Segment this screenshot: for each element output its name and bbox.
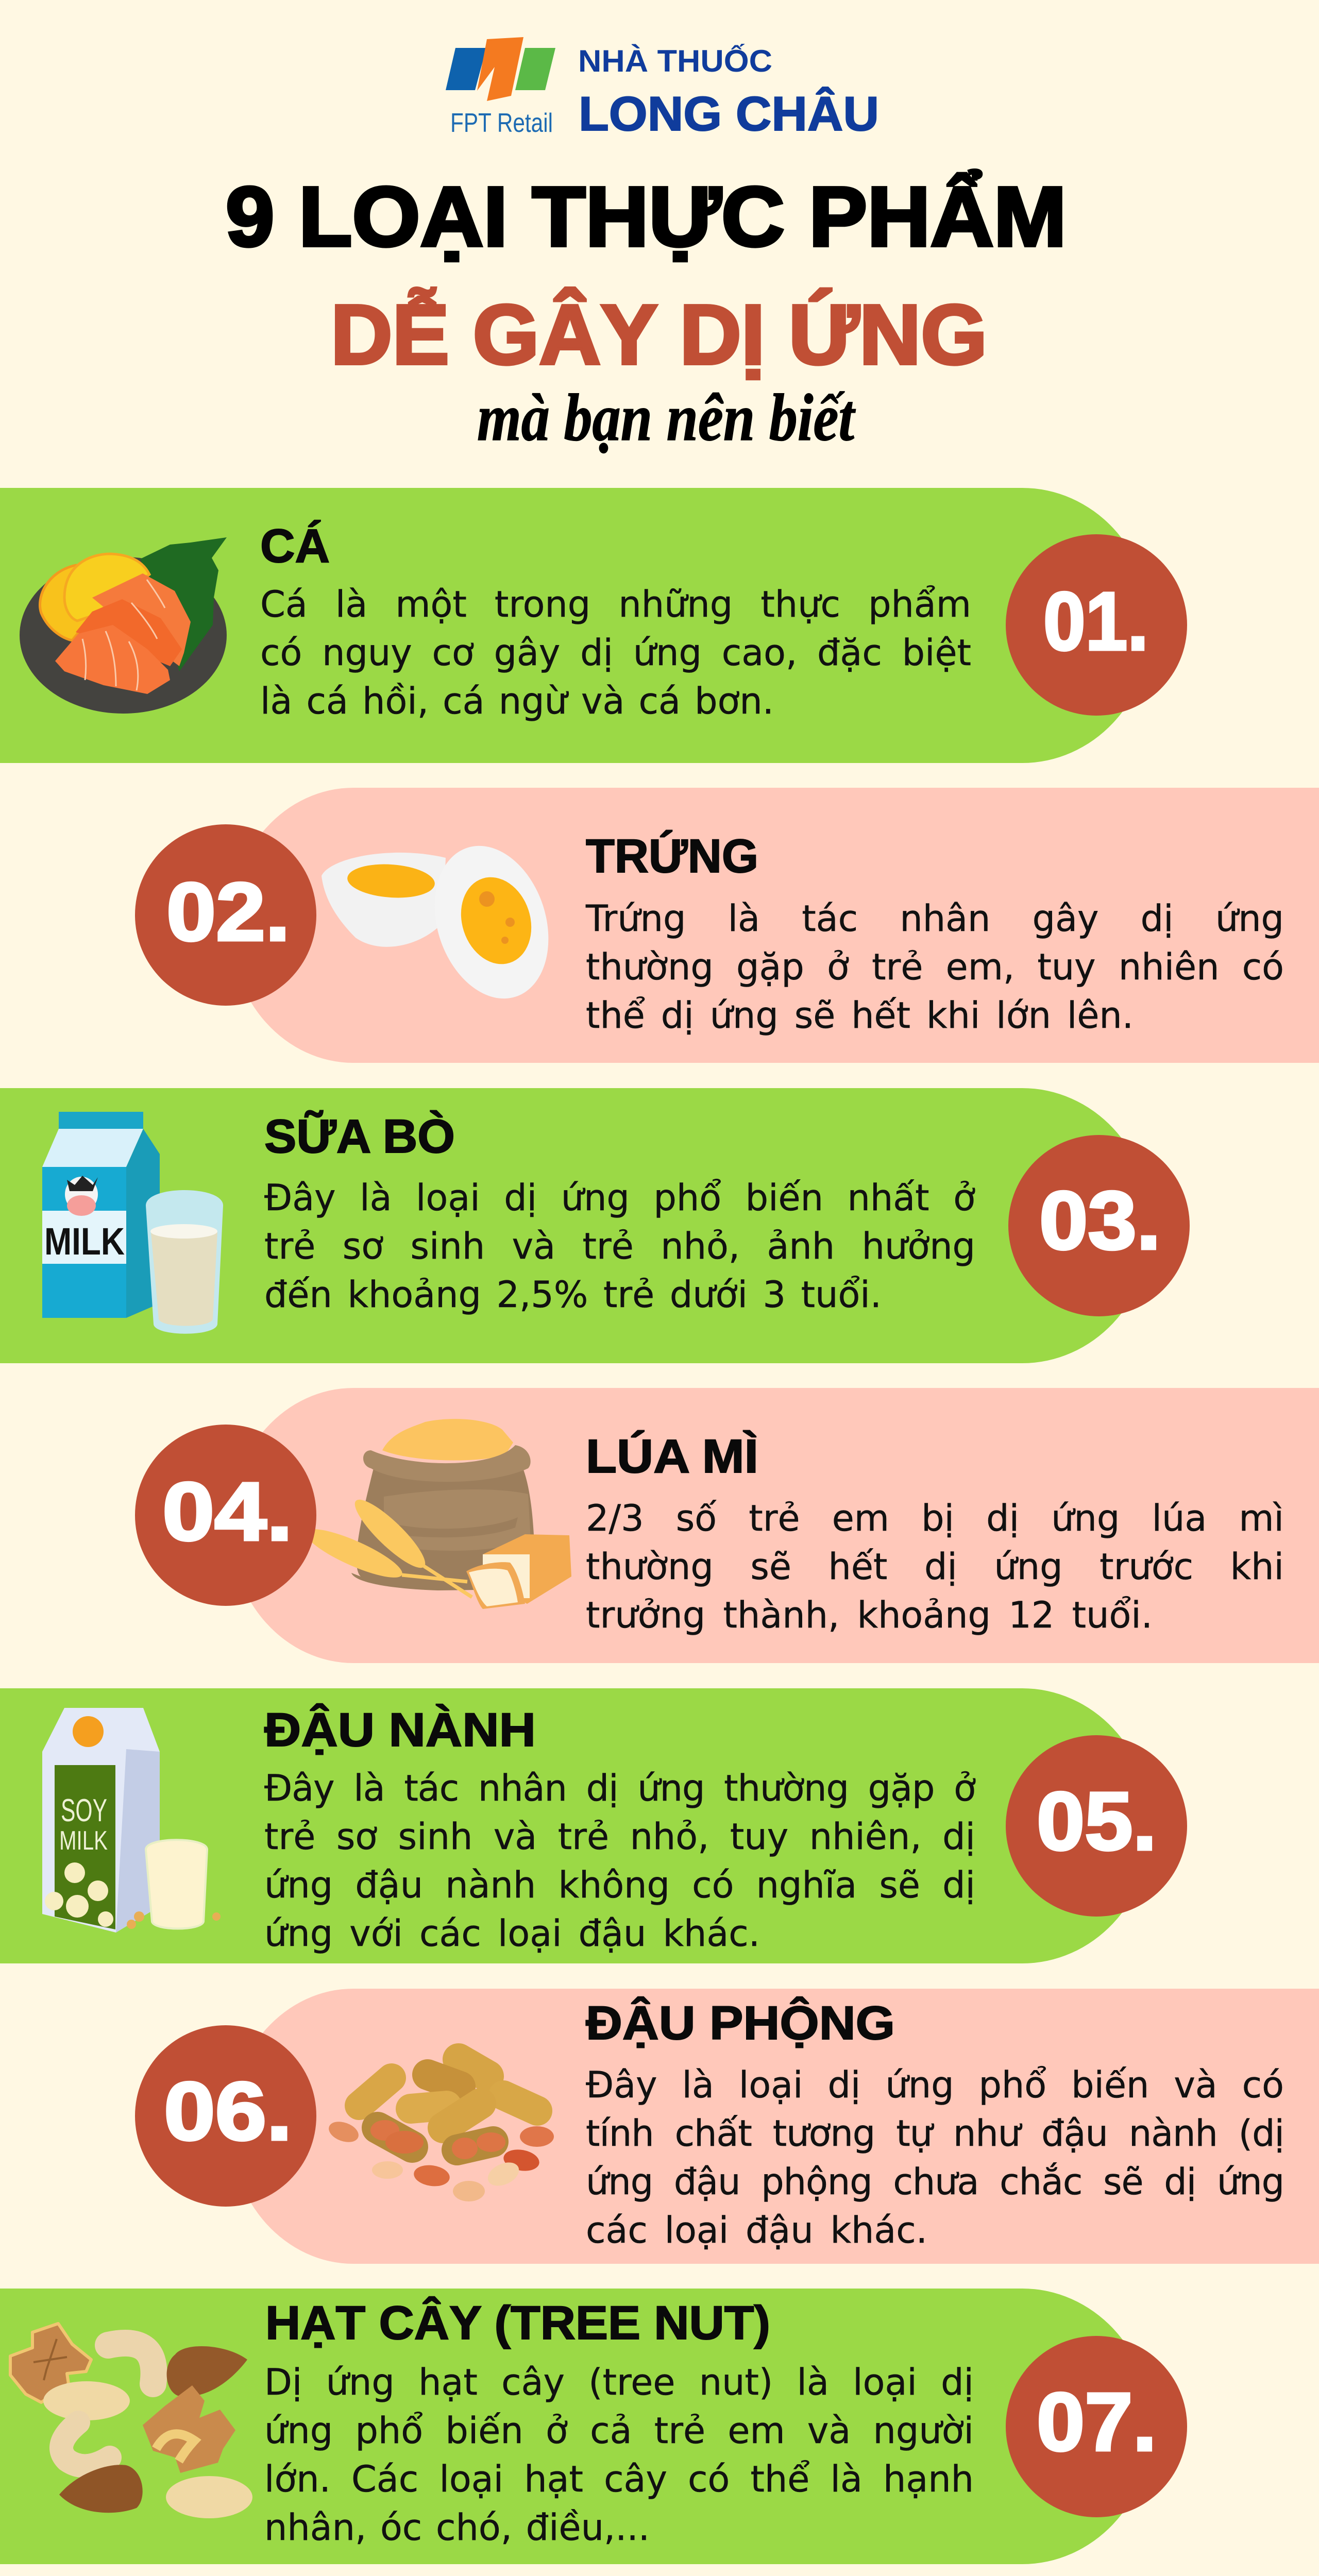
number badge 07	[1006, 2336, 1187, 2517]
body text: Đây là tác nhân dị ứng thường gặp ở	[264, 1767, 975, 1809]
title line 2: DỄ GÂY DỊ ỨNG	[331, 287, 987, 382]
number badge 01: 01.	[1043, 575, 1148, 667]
icon: soy milk: MILK	[59, 1826, 108, 1856]
body text	[586, 2064, 1284, 2251]
body text: ứng phổ biến ở cả trẻ em và người	[264, 2410, 974, 2452]
number badge 02: 02.	[166, 866, 290, 958]
number badge 06: 06.	[164, 2065, 292, 2157]
body text: nhân, óc chó, điều,...	[264, 2506, 650, 2549]
number badge 01	[1006, 534, 1187, 716]
body text: Dị ứng hạt cây (tree nut) là loại dị	[264, 2361, 974, 2403]
body text	[264, 1177, 975, 1316]
body text: các loại đậu khác.	[586, 2209, 927, 2251]
body text: Trứng là tác nhân gây dị ứng	[586, 897, 1284, 940]
panel 7: hạt cây	[0, 2289, 1187, 2564]
number badge 04	[135, 1425, 316, 1606]
body text	[585, 897, 1284, 1037]
body text: ứng với các loại đậu khác.	[264, 1912, 760, 1955]
panel 4: lúa mì	[135, 1388, 1319, 1663]
body text: đến khoảng 2,5% trẻ dưới 3 tuổi.	[264, 1274, 882, 1316]
panel 6: đậu phộng	[135, 1989, 1319, 2264]
icon: soy milk	[42, 1708, 221, 1933]
icon: milk carton and glass: MILK	[44, 1220, 125, 1263]
heading: ĐẬU NÀNH	[264, 1703, 536, 1756]
body text: Đây là loại dị ứng phổ biến và có	[586, 2064, 1284, 2106]
icon: tree nuts	[10, 2324, 252, 2518]
number badge 04: 04.	[162, 1465, 293, 1557]
panel background	[0, 1688, 1151, 1963]
icon: milk carton and glass	[42, 1112, 223, 1334]
panel background	[230, 1989, 1319, 2264]
icon: salmon on plate	[20, 537, 227, 714]
panel background	[230, 1388, 1319, 1663]
icon: peanuts	[326, 2059, 554, 2201]
logo: FPT Retail Nhà thuốc Long Châu: LONG CHÂU	[579, 86, 879, 141]
number badge 03: 03.	[1039, 1174, 1161, 1266]
icon: boiled egg	[322, 831, 567, 1013]
heading: CÁ	[260, 520, 330, 572]
icon: wheat sack and bread	[301, 1419, 571, 1609]
heading: ĐẬU PHỘNG	[586, 1996, 895, 2049]
heading: TRỨNG	[586, 829, 758, 883]
panel 1: cá	[0, 488, 1187, 763]
panel background	[0, 2289, 1151, 2564]
body text	[264, 1767, 976, 1955]
number badge 05	[1006, 1735, 1187, 1917]
panel 3: sữa bò	[0, 1088, 1190, 1363]
number badge 06	[135, 2025, 316, 2207]
panel background	[230, 788, 1319, 1063]
logo: FPT Retail Nhà thuốc Long Châu	[446, 37, 879, 141]
body text: Cá là một trong những thực phẩm	[260, 583, 971, 625]
heading: LÚA MÌ	[586, 1430, 758, 1483]
body text: trẻ sơ sinh và trẻ nhỏ, ảnh hưởng	[264, 1225, 975, 1267]
subtitle: mà bạn nên biết	[477, 381, 856, 455]
logo: FPT Retail Nhà thuốc Long Châu: FPT Retail	[450, 108, 553, 138]
title line 1: 9 LOẠI THỰC PHẨM	[226, 170, 1067, 264]
body text: tính chất tương tự như đậu nành (dị	[586, 2112, 1284, 2155]
body text	[586, 1497, 1284, 1636]
body text: 2/3 số trẻ em bị dị ứng lúa mì	[586, 1497, 1284, 1539]
logo: FPT Retail Nhà thuốc Long Châu: NHÀ THUỐC	[578, 44, 772, 78]
body text: là cá hồi, cá ngừ và cá bơn.	[260, 680, 774, 722]
body text: ứng đậu nành không có nghĩa sẽ dị	[264, 1864, 975, 1906]
panel background	[0, 488, 1151, 763]
number badge 03	[1008, 1135, 1190, 1316]
body text: thể dị ứng sẽ hết khi lớn lên.	[586, 994, 1134, 1037]
body text	[264, 2361, 974, 2549]
body text: ứng đậu phộng chưa chắc sẽ dị ứng	[586, 2161, 1284, 2203]
body text: thường sẽ hết dị ứng trước khi	[586, 1546, 1284, 1588]
body text	[260, 583, 971, 722]
panel background	[0, 1088, 1151, 1363]
number badge 05: 05.	[1037, 1775, 1157, 1867]
body text: lớn. Các loại hạt cây có thể là hạnh	[264, 2458, 974, 2500]
body text: trưởng thành, khoảng 12 tuổi.	[586, 1594, 1153, 1636]
body text: Đây là loại dị ứng phổ biến nhất ở	[264, 1177, 975, 1219]
body text: thường gặp ở trẻ em, tuy nhiên có	[586, 946, 1284, 988]
number badge 07: 07.	[1037, 2376, 1157, 2468]
panel 2: trứng	[135, 788, 1319, 1063]
heading: SỮA BÒ	[264, 1110, 455, 1163]
header: logo and title	[226, 37, 1067, 455]
number badge 02	[135, 824, 316, 1006]
body text: có nguy cơ gây dị ứng cao, đặc biệt	[260, 632, 971, 674]
panel 5: đậu nành	[0, 1688, 1187, 1963]
heading: HẠT CÂY (TREE NUT)	[265, 2296, 770, 2349]
icon: soy milk: SOY	[61, 1793, 107, 1828]
body text: trẻ sơ sinh và trẻ nhỏ, tuy nhiên, dị	[264, 1816, 975, 1858]
